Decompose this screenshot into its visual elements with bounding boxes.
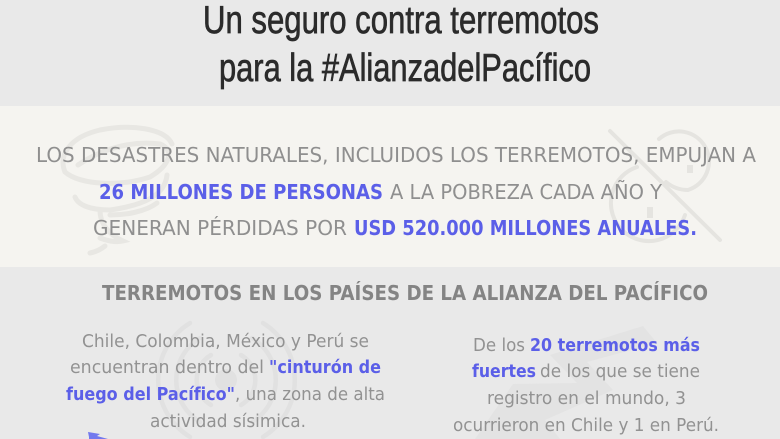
text block: ring of fire: Chile, Colombia, México y Perú se bbox=[82, 332, 369, 352]
text block: strongest earthquakes bbox=[453, 336, 719, 436]
panel: natural disasters bbox=[0, 106, 780, 267]
title bbox=[203, 0, 599, 90]
panel: earthquakes in the Pacific Alliance bbox=[66, 281, 719, 439]
intro text: USD 520.000 MILLONES ANUALES. bbox=[354, 216, 697, 240]
text block: strongest earthquakes: De los bbox=[473, 336, 525, 356]
intro text: 26 MILLONES DE PERSONAS bbox=[99, 180, 383, 204]
arrow bbox=[88, 432, 108, 439]
text block: strongest earthquakes: fuertes bbox=[472, 362, 536, 382]
icon: tornado bbox=[63, 127, 172, 253]
icon: crossed-out circles bbox=[610, 131, 720, 241]
text block: strongest earthquakes: 20 terremotos más bbox=[530, 336, 700, 356]
text block: ring of fire: actividad sísimica. bbox=[150, 412, 306, 432]
intro text: A LA POBREZA CADA AÑO Y bbox=[390, 180, 663, 204]
text block: ring of fire: fuego del Pacífico" bbox=[66, 385, 235, 405]
intro text bbox=[36, 143, 756, 240]
intro text: LOS DESASTRES NATURALES, INCLUIDOS LOS TERREMOTOS, EMPUJAN A bbox=[36, 143, 756, 167]
text block: ring of fire: , una zona de alta bbox=[235, 385, 385, 405]
title: para la #AlianzadelPacífico bbox=[219, 47, 591, 90]
text block: strongest earthquakes: de los que se tiene bbox=[540, 362, 700, 382]
text block: ring of fire: encuentran dentro del bbox=[70, 358, 264, 378]
heading: TERREMOTOS EN LOS PAÍSES DE LA ALIANZA DEL PACÍFICO bbox=[102, 281, 708, 305]
text block: ring of fire bbox=[66, 332, 385, 432]
text block: ring of fire: "cinturón de bbox=[269, 358, 381, 378]
text block: strongest earthquakes: registro en el mundo, 3 bbox=[487, 389, 686, 409]
intro text: GENERAN PÉRDIDAS POR bbox=[93, 216, 347, 240]
icon: seismic waves bbox=[158, 323, 295, 437]
text block: strongest earthquakes: ocurrieron en Chile y 1 en Perú. bbox=[453, 416, 719, 436]
title: Un seguro contra terremotos bbox=[203, 0, 599, 42]
icon: lightning bolt bbox=[475, 326, 657, 439]
